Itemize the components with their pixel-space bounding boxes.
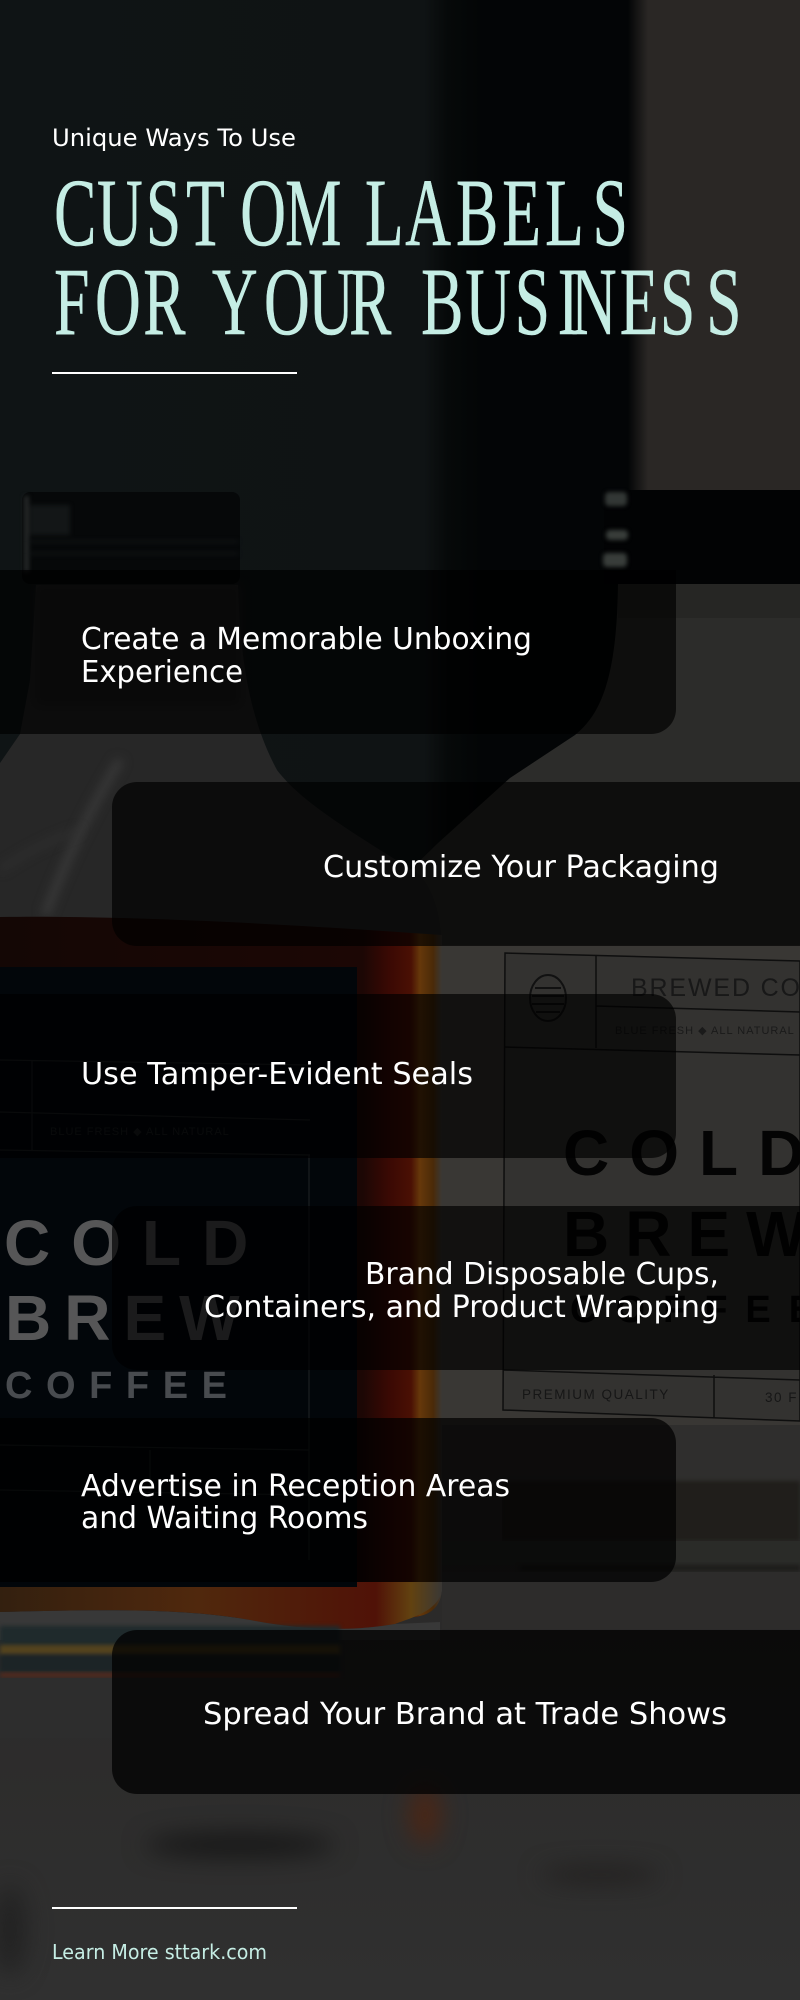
right bottle label xyxy=(503,953,800,1421)
top divider line xyxy=(52,372,297,374)
title: LABELS xyxy=(365,160,628,266)
panel 3: tamper seals xyxy=(0,994,676,1158)
panel 5: reception areas xyxy=(0,1418,676,1582)
bottle base xyxy=(0,1582,442,1738)
panel 3: tamper seals: Use Tamper-Evident Seals xyxy=(81,1057,473,1092)
left bottle glass highlight xyxy=(45,760,120,915)
panel 2: packaging: Customize Your Packaging xyxy=(323,850,719,885)
panel 2: packaging xyxy=(112,782,800,946)
title: CUSTOM xyxy=(54,160,341,266)
panel 1: unboxing xyxy=(0,570,676,734)
right bottle label: PREMIUM QUALITY xyxy=(522,1387,670,1402)
panel 5: reception areas: Advertise in Reception Areas xyxy=(81,1469,510,1504)
logo seal xyxy=(530,975,566,1021)
left bottle xyxy=(0,492,442,1738)
right bottle cap xyxy=(603,490,800,584)
left bottle label: BLUE FRESH ◆ ALL NATURAL xyxy=(50,1126,230,1138)
title: FOR xyxy=(54,249,186,355)
left bottle cap xyxy=(22,492,240,584)
panel 6: trade shows: Spread Your Brand at Trade Shows xyxy=(203,1697,727,1732)
left bottle label: BREW xyxy=(5,1282,253,1354)
title xyxy=(54,160,741,355)
table surface xyxy=(0,1540,800,2000)
panel 5: reception areas: and Waiting Rooms xyxy=(81,1501,368,1536)
liquid xyxy=(0,917,442,1618)
panel 6: trade shows xyxy=(112,1630,800,1794)
right bottle label: BREWED CO xyxy=(631,974,800,1002)
panel 1: unboxing: Create a Memorable Unboxing xyxy=(81,622,532,657)
footer link text: Learn More sttark.com xyxy=(52,1940,267,1964)
left bottle label: COFFEE xyxy=(5,1365,227,1407)
title: YOUR xyxy=(212,249,392,355)
panel 4: disposable cups xyxy=(112,1206,800,1370)
right bottle xyxy=(400,490,800,1540)
bottom divider line xyxy=(52,1907,297,1909)
left bottle label: COLD xyxy=(4,1207,269,1279)
right bottle label: BLUE FRESH ◆ ALL NATURAL xyxy=(615,1025,795,1037)
panel 1: unboxing: Experience xyxy=(81,655,243,690)
title: BUSINESS xyxy=(421,249,741,355)
blurred table shadows xyxy=(0,1425,800,1975)
subtitle: Unique Ways To Use xyxy=(52,124,296,152)
panel 4: disposable cups: Containers, and Product Wrapping xyxy=(204,1290,719,1325)
left bottle label xyxy=(0,967,357,1587)
panel 4: disposable cups: Brand Disposable Cups, xyxy=(365,1257,719,1292)
